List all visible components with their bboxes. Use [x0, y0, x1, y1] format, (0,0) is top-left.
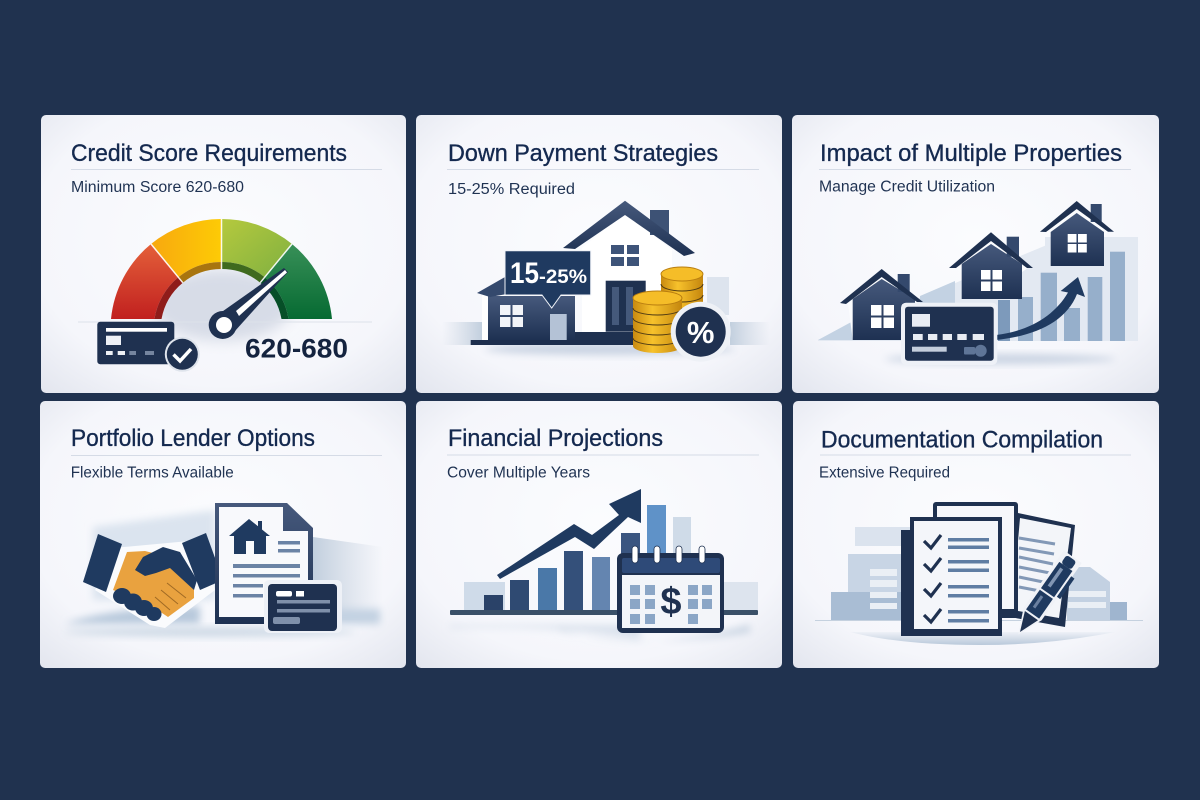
score range value: 620-680	[245, 334, 348, 364]
subtitle: Manage Credit Utilization	[819, 178, 995, 196]
background swoosh	[65, 510, 383, 637]
panel: down payment strategies	[416, 115, 782, 393]
icon: checklist	[901, 517, 1002, 636]
icon: percent badge	[671, 302, 731, 362]
icon: handshake	[83, 533, 223, 628]
icon: back document	[1010, 513, 1075, 627]
callout: 15-25% badge: 15	[510, 257, 539, 290]
icon: pen	[1009, 550, 1084, 642]
icon: large house	[1040, 201, 1114, 266]
icon: small house	[840, 269, 923, 340]
panel: impact of multiple properties	[792, 115, 1159, 393]
icon: calendar with dollar: $	[660, 581, 682, 623]
panel: documentation compilation	[793, 401, 1159, 668]
title: Credit Score Requirements	[71, 140, 347, 167]
panel: financial projections	[416, 401, 782, 668]
gauge needle	[209, 268, 288, 339]
title: Impact of Multiple Properties	[820, 140, 1122, 167]
icon: document with house	[215, 503, 313, 624]
subtitle: 15-25% Required	[448, 181, 575, 198]
title: Down Payment Strategies	[448, 140, 718, 167]
subtitle: Minimum Score 620-680	[71, 179, 244, 196]
callout: 15-25% badge: -25%	[539, 267, 587, 288]
callout: 15-25% badge	[505, 251, 591, 308]
panel: credit score requirements	[41, 115, 406, 393]
icon: calendar with dollar	[617, 546, 724, 633]
chart: credit score gauge	[111, 219, 332, 319]
arrow: growth trend	[497, 489, 641, 579]
subtitle: Flexible Terms Available	[71, 464, 234, 482]
title: Documentation Compilation	[821, 426, 1103, 454]
icon: credit card	[901, 303, 997, 365]
icon: medium house	[949, 232, 1033, 299]
icon: coin stacks	[633, 267, 703, 353]
subtitle: Cover Multiple Years	[447, 464, 590, 482]
title: Financial Projections	[448, 425, 663, 452]
title: Portfolio Lender Options	[71, 425, 315, 452]
chart: bar chart	[450, 505, 758, 615]
icon: middle document	[933, 502, 1018, 618]
arrow: growth curve	[996, 277, 1085, 340]
subtitle: Extensive Required	[819, 464, 950, 482]
background buildings	[815, 527, 1143, 645]
icon: credit card with check	[97, 322, 200, 372]
icon: percent badge: %	[687, 315, 714, 350]
icon: house	[471, 201, 729, 345]
panel: portfolio lender options	[40, 401, 406, 668]
chart: rising bars background	[818, 237, 1138, 341]
icon: small card	[264, 580, 342, 633]
